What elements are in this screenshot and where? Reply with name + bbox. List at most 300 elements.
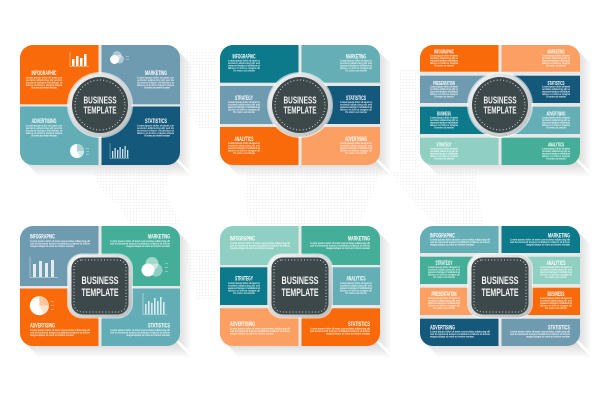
badge title: BUSINESS: [284, 94, 316, 106]
body text: labore et dolore magna ali: [340, 108, 372, 112]
infographic 1: four-part circle: [20, 45, 192, 177]
heading: BUSINESS: [548, 292, 564, 298]
icon: pie chart: text: [86, 147, 89, 150]
body text: sed do eiusmod tempor incididunt ut labore et dolore: [430, 241, 491, 244]
icon: pie chart: text: [51, 308, 54, 311]
center badge: [267, 254, 333, 318]
body text: Lorem ipsum dolor sit amet consectetur adipiscing elit: [110, 240, 170, 243]
body text: eiusmod tempor incididunt ut: [428, 302, 460, 305]
icon: venn circles: [142, 257, 168, 276]
cell: business: [502, 288, 580, 315]
body text: Lorem ipsum dolor sit amet con: [137, 76, 174, 80]
body text: labore et dolore magna: [430, 62, 459, 65]
body text: [310, 242, 371, 250]
body text: sectetur adipiscing elit sed: [228, 144, 260, 148]
body text: eiusmod tempor incididunt ut: [428, 271, 460, 274]
infographic 4: four-part rounded square: [20, 226, 192, 358]
body text: labore et dolore magna ali: [340, 67, 372, 70]
body text: labore et dolore magna: [542, 124, 571, 127]
body text: sed do eiusmod tempor incididunt ut labore et dolore: [230, 244, 291, 247]
badge title: BUSINESS: [482, 275, 518, 287]
heading: MARKETING: [145, 71, 167, 77]
badge title: [84, 94, 116, 116]
body text: sed do eiusmod tempor incididunt ut labore et dolore: [510, 333, 571, 336]
cell: presentation: [420, 76, 498, 103]
icon: pie chart: text: [51, 304, 54, 307]
body text: magna aliqua ut enim ad minim veniam: [30, 334, 75, 337]
cells: [20, 45, 180, 165]
body text: Lorem ipsum dolor sit amet co: [228, 101, 260, 104]
body text: Ut enim ad minim: [546, 64, 567, 68]
body text: sectetur adipiscing elit se: [542, 57, 571, 60]
icon: bar chart: [30, 257, 58, 277]
body text: Ut enim ad minim: [233, 152, 256, 155]
cell: business: [420, 107, 498, 134]
heading: INFOGRAPHIC: [232, 54, 256, 60]
body text: eiusmod tempor incididunt ut: [228, 147, 260, 150]
body text: Ut enim ad minim: [434, 126, 455, 130]
center badge: [67, 254, 133, 318]
heading: INFOGRAPHIC: [430, 233, 455, 239]
body text: Lorem ipsum dolor sit amet co: [340, 60, 372, 62]
body text: Ut enim ad minim: [233, 292, 256, 295]
heading: PRESENTATION: [433, 81, 455, 87]
body text: sectetur adipiscing elit sed: [340, 104, 372, 106]
cell: advertising: [502, 107, 580, 134]
body text: Lorem ipsum dolor sit amet co: [228, 282, 260, 285]
body text: labore et dolore magna ali: [540, 274, 572, 276]
heading: MARKETING: [548, 233, 570, 239]
body text: Lorem ipsum dolor sit amet co: [228, 142, 260, 145]
body text: eiusmod tempor incididunt: [430, 152, 458, 156]
heading: ANALYTICS: [346, 277, 366, 283]
body text: sectetur adipiscing elit sed do: [137, 127, 174, 130]
body text: labore et dolore magna: [542, 155, 571, 158]
body text: Ut enim ad minim: [546, 126, 567, 130]
body text: Lorem ipsum dolor sit amet: [542, 54, 570, 58]
body text: Ut enim ad minim: [434, 96, 455, 98]
body text: [230, 328, 291, 336]
heading: MARKETING: [346, 54, 366, 60]
body text: eiusmod tempor incididunt: [430, 122, 458, 124]
body text: [542, 116, 571, 130]
body text: sectetur adipiscing elit se: [542, 150, 571, 153]
cell: strategy: [420, 138, 498, 165]
cell: marketing: [302, 226, 380, 265]
icon: bar chart: [143, 293, 167, 314]
body text: eiusmod tempor incididunt ut: [340, 106, 372, 109]
body text: Ut enim ad minim veniam: [31, 86, 58, 90]
body text: sectetur adipiscing elit sed do: [26, 79, 63, 82]
body text: [430, 54, 459, 68]
body text: magna aliqua ut enim ad minim veniam: [526, 244, 571, 246]
body text: Lorem ipsum dolor sit amet co: [340, 101, 372, 104]
body text: sectetur adipiscing elit se: [542, 88, 571, 91]
body text: eiusmod tempor incididunt ut: [228, 106, 260, 109]
body text: [542, 86, 571, 98]
heading: INFOGRAPHIC: [230, 236, 255, 242]
body text: [230, 242, 291, 250]
cell: strategy: [420, 257, 498, 284]
body text: labore et dolore magna ali: [540, 304, 572, 308]
heading: ADVERTISING: [30, 324, 55, 330]
body text: sed do eiusmod tempor incididunt ut labore et dolore: [430, 333, 491, 336]
badge title: TEMPLATE: [484, 104, 516, 116]
body text: Ut enim ad minim: [345, 152, 368, 155]
body text: magna aliqua ut enim ad minim veniam: [230, 332, 275, 336]
icon: venn circles: text: [165, 266, 168, 269]
long shadow: [424, 49, 592, 177]
body text: [430, 148, 459, 160]
body text: Ut enim ad minim: [434, 158, 455, 160]
body text: [542, 54, 571, 68]
body text: labore et dolore magna ali: [228, 290, 260, 292]
body text: Lorem ipsum dolor sit amet: [430, 148, 458, 150]
body text: Lorem ipsum dolor sit amet con: [26, 124, 63, 128]
cell: strategy: [220, 86, 274, 124]
cell: marketing: [102, 226, 180, 286]
long shadow: [224, 230, 392, 358]
icon: pie chart: text: [51, 300, 54, 303]
cells: [220, 226, 380, 346]
body text: magna aliqua ut enim ad minim veniam: [30, 245, 75, 248]
body text: labore et dolore magna aliqua: [137, 84, 175, 87]
body text: sed do eiusmod tempor incididunt ut labore et dolore: [510, 241, 571, 244]
cell: marketing: [502, 226, 580, 253]
cells: [420, 45, 580, 165]
icon: pie chart: text: [86, 150, 89, 153]
heading: ADVERTISING: [230, 322, 255, 328]
cell: strategy: [220, 267, 298, 305]
badge title: BUSINESS: [484, 94, 516, 106]
cell: infographic: [220, 45, 298, 83]
body text: labore et dolore magna ali: [428, 304, 460, 308]
body text: sectetur adipiscing elit sed do: [26, 127, 63, 130]
icon: bar chart: [110, 143, 129, 158]
heading: STRATEGY: [235, 96, 253, 102]
body text: [428, 297, 460, 310]
body text: eiusmod tempor incididunt ut: [26, 130, 62, 132]
body text: eiusmod tempor incididunt ut: [540, 271, 572, 274]
body text: magna aliqua ut enim ad minim veniam: [430, 244, 475, 246]
body text: Ut enim ad minim veniam: [31, 134, 58, 138]
body text: Ut enim ad minim: [546, 96, 567, 98]
body text: Ut enim ad minim: [434, 64, 455, 68]
heading: PRESENTATION: [432, 292, 456, 298]
cell: advertising: [20, 106, 98, 165]
body text: Lorem ipsum dolor sit amet consectetur adipiscing elit: [230, 328, 290, 330]
body text: Ut enim ad minim: [233, 111, 256, 114]
cells: [220, 45, 380, 165]
body text: sectetur adipiscing elit sed: [540, 300, 572, 302]
body text: labore et dolore magna: [430, 124, 459, 127]
heading: ADVERTISING: [430, 325, 455, 331]
body text: labore et dolore magna ali: [428, 274, 460, 276]
body text: [228, 142, 260, 155]
body text: [26, 124, 63, 138]
body text: [30, 329, 91, 337]
body text: eiusmod tempor incididunt: [542, 122, 570, 124]
body text: [26, 76, 63, 90]
body text: Lorem ipsum dolor sit amet co: [228, 60, 260, 62]
body text: Lorem ipsum dolor sit amet co: [340, 142, 372, 145]
badge title: [482, 275, 518, 299]
body text: [228, 60, 260, 72]
body text: Lorem ipsum dolor sit amet consectetur adipiscing elit: [110, 329, 170, 332]
body text: Ut enim ad minim: [345, 70, 368, 72]
heading: ANALYTICS: [546, 261, 566, 267]
badge title: TEMPLATE: [84, 104, 116, 116]
badge title: BUSINESS: [84, 94, 116, 106]
body text: sectetur adipiscing elit sed: [228, 104, 260, 106]
body text: eiusmod tempor incididunt ut: [26, 82, 62, 84]
infographic 5: six-part rounded square: [220, 226, 392, 358]
long shadow: [224, 49, 392, 177]
cell: infographic: [220, 226, 298, 265]
cell: infographic: [420, 226, 498, 253]
body text: sectetur adipiscing elit se: [430, 119, 459, 122]
body text: eiusmod tempor incididunt ut: [137, 130, 174, 132]
icon: bar chart: [70, 52, 89, 66]
badge title: BUSINESS: [282, 275, 318, 287]
body text: Lorem ipsum dolor sit amet consectetur adipiscing elit: [510, 238, 570, 242]
heading: MARKETING: [348, 236, 370, 242]
body text: [340, 60, 372, 72]
body text: sed do eiusmod tempor incididunt ut labore et dolore: [30, 332, 91, 334]
body text: eiusmod tempor incididunt ut: [340, 147, 372, 150]
long shadow: [24, 49, 192, 177]
body text: eiusmod tempor incididunt ut: [340, 287, 372, 290]
body text: labore et dolore magna aliqua: [137, 132, 175, 135]
body text: Lorem ipsum dolor sit amet consectetur adipiscing elit: [310, 242, 370, 245]
background: dotted world map: [92, 50, 484, 300]
icon: venn circles: [110, 51, 129, 64]
body text: labore et dolore magna: [430, 93, 459, 96]
body text: labore et dolore magna aliqua: [26, 132, 63, 135]
badge title: BUSINESS: [82, 275, 118, 287]
body text: Lorem ipsum dolor sit amet co: [428, 266, 460, 269]
icon: pie chart: [30, 296, 54, 315]
cell: advertising: [302, 127, 380, 165]
body text: eiusmod tempor incididunt ut: [228, 287, 260, 290]
body text: Lorem ipsum dolor sit amet co: [428, 297, 460, 300]
cell: statistics: [102, 106, 180, 165]
body text: eiusmod tempor incididunt ut: [228, 64, 260, 68]
badge title: [484, 94, 516, 116]
body text: [428, 266, 460, 279]
icon: venn circles: text: [165, 262, 168, 265]
heading: STATISTICS: [348, 322, 370, 328]
cells: [420, 226, 580, 346]
body text: Lorem ipsum dolor sit amet con: [137, 124, 174, 128]
body text: Ut enim ad minim: [546, 158, 567, 160]
body text: sed do eiusmod tempor incididunt ut labore et dolore: [310, 244, 371, 247]
cell: statistics: [502, 76, 580, 103]
body text: [228, 282, 260, 295]
body text: Lorem ipsum dolor sit amet con: [26, 76, 63, 80]
long shadow: [424, 230, 592, 358]
heading: ADVERTISING: [345, 137, 367, 143]
body text: Lorem ipsum dolor sit amet co: [340, 282, 372, 285]
heading: INFOGRAPHIC: [32, 71, 57, 77]
body text: sectetur adipiscing elit sed: [428, 300, 460, 302]
body text: [340, 282, 372, 295]
icon: venn circles: text: [165, 270, 168, 273]
cell: advertising: [220, 308, 298, 346]
badge title: TEMPLATE: [482, 287, 518, 299]
body text: labore et dolore magna aliqua: [26, 84, 63, 87]
cell: analytics: [302, 267, 380, 305]
body text: sectetur adipiscing elit sed: [340, 144, 372, 148]
body text: Lorem ipsum dolor sit amet: [430, 116, 458, 120]
body text: Ut enim ad minim: [233, 70, 256, 72]
body text: [137, 76, 175, 90]
body text: Ut enim ad minim: [433, 307, 456, 310]
icon: pie chart: [70, 144, 89, 158]
badge title: TEMPLATE: [284, 104, 316, 116]
body text: labore et dolore magna ali: [228, 108, 260, 112]
body text: sed do eiusmod tempor incididunt ut labore et dolore: [110, 332, 171, 334]
icon: pie chart: text: [86, 153, 89, 156]
body text: [540, 266, 572, 279]
cell: analytics: [220, 127, 298, 165]
body text: Ut enim ad minim veniam: [144, 86, 171, 90]
body text: [228, 101, 260, 114]
body text: sed do eiusmod tempor incididunt ut labore et dolore: [110, 242, 171, 246]
body text: sed do eiusmod tempor incididunt ut labore et dolore: [230, 330, 291, 333]
body text: [430, 238, 491, 246]
body text: magna aliqua ut enim ad minim veniam: [126, 245, 171, 248]
infographic 2: six-part circle: [220, 45, 392, 177]
body text: sectetur adipiscing elit se: [430, 150, 459, 153]
body text: magna aliqua ut enim ad minim veniam: [230, 247, 275, 250]
cell: analytics: [502, 138, 580, 165]
body text: eiusmod tempor incididunt: [430, 60, 458, 62]
body text: Lorem ipsum dolor sit amet consectetur adipiscing elit: [510, 330, 570, 334]
body text: Lorem ipsum dolor sit amet: [430, 86, 458, 88]
heading: STRATEGY: [436, 261, 452, 267]
body text: Lorem ipsum dolor sit amet consectetur adipiscing elit: [30, 240, 90, 243]
body text: magna aliqua ut enim ad minim veniam: [430, 336, 475, 338]
body text: eiusmod tempor incididunt ut: [340, 64, 372, 68]
cells: [20, 226, 180, 346]
cell: statistics: [102, 288, 180, 346]
icon: venn circles: text: [126, 55, 129, 58]
icon: venn circles: text: [126, 58, 129, 61]
body text: [542, 148, 571, 160]
heading: STRATEGY: [235, 277, 253, 283]
body text: Ut enim ad minim: [345, 111, 368, 114]
body text: [510, 238, 571, 246]
body text: labore et dolore magna ali: [228, 67, 260, 70]
body text: sectetur adipiscing elit sed: [228, 62, 260, 65]
heading: ANALYTICS: [234, 137, 254, 143]
body text: labore et dolore magna ali: [340, 290, 372, 292]
heading: STRATEGY: [436, 143, 452, 149]
body text: Ut enim ad minim: [345, 292, 368, 295]
heading: INFOGRAPHIC: [30, 235, 55, 241]
body text: [110, 329, 171, 337]
body text: labore et dolore magna ali: [340, 150, 372, 152]
heading: ADVERTISING: [546, 112, 566, 118]
badge title: [82, 275, 118, 299]
body text: Lorem ipsum dolor sit amet consectetur adipiscing elit: [430, 238, 490, 242]
heading: STATISTICS: [346, 96, 366, 102]
body text: Lorem ipsum dolor sit amet: [542, 148, 570, 150]
heading: ANALYTICS: [548, 143, 564, 149]
body text: magna aliqua ut enim ad minim veniam: [126, 334, 171, 337]
body text: eiusmod tempor incididunt ut: [137, 82, 174, 84]
center badge: [267, 72, 333, 138]
cell: statistics: [326, 86, 380, 124]
badge title: [284, 94, 316, 116]
body text: labore et dolore magna: [430, 155, 459, 158]
body text: eiusmod tempor incididunt: [542, 60, 570, 62]
body text: Lorem ipsum dolor sit amet: [542, 116, 570, 120]
body text: Lorem ipsum dolor sit amet consectetur adipiscing elit: [230, 242, 290, 245]
infographic 3: eight-part circle: [420, 45, 592, 177]
cell: infographic: [20, 45, 98, 104]
body text: Lorem ipsum dolor sit amet consectetur adipiscing elit: [430, 330, 490, 334]
cell: statistics: [302, 308, 380, 346]
center badge: [467, 254, 533, 318]
body text: sectetur adipiscing elit se: [430, 88, 459, 91]
body text: sectetur adipiscing elit sed: [540, 268, 572, 272]
cell: marketing: [102, 45, 180, 104]
body text: sectetur adipiscing elit sed: [340, 62, 372, 65]
body text: eiusmod tempor incididunt: [430, 90, 458, 94]
body text: eiusmod tempor incididunt: [542, 90, 570, 94]
badge title: TEMPLATE: [82, 287, 118, 299]
body text: labore et dolore magna: [542, 93, 571, 96]
body text: Lorem ipsum dolor sit amet co: [540, 266, 572, 269]
body text: Lorem ipsum dolor sit amet: [430, 54, 458, 58]
body text: [430, 330, 491, 338]
heading: INFOGRAPHIC: [434, 50, 454, 56]
body text: Ut enim ad minim: [545, 307, 568, 310]
body text: sectetur adipiscing elit sed: [228, 284, 260, 288]
body text: Lorem ipsum dolor sit amet consectetur adipiscing elit: [310, 328, 370, 330]
cell: advertising: [20, 288, 98, 346]
body text: [30, 240, 91, 248]
body text: sectetur adipiscing elit sed: [340, 284, 372, 288]
body text: [137, 124, 175, 138]
cell: presentation: [420, 288, 498, 315]
body text: [510, 330, 571, 338]
body text: sed do eiusmod tempor incididunt ut labore et dolore: [30, 242, 91, 246]
badge title: TEMPLATE: [282, 287, 318, 299]
heading: STATISTICS: [148, 324, 170, 330]
body text: Lorem ipsum dolor sit amet consectetur adipiscing elit: [30, 329, 90, 332]
center badge: [467, 72, 533, 138]
body text: [110, 240, 171, 248]
body text: sectetur adipiscing elit sed do: [137, 79, 174, 82]
heading: MARKETING: [148, 235, 170, 241]
heading: STATISTICS: [548, 325, 570, 331]
body text: sed do eiusmod tempor incididunt ut labore et dolore: [310, 330, 371, 333]
body text: [340, 142, 372, 155]
cell: analytics: [502, 257, 580, 284]
cell: marketing: [502, 45, 580, 72]
cell: infographic: [20, 226, 98, 286]
badge title: [282, 275, 318, 299]
body text: labore et dolore magna ali: [228, 150, 260, 152]
cell: marketing: [302, 45, 380, 83]
body text: eiusmod tempor incididunt: [542, 152, 570, 156]
cell: advertising: [420, 319, 498, 346]
body text: sectetur adipiscing elit se: [542, 119, 571, 122]
cell: infographic: [420, 45, 498, 72]
